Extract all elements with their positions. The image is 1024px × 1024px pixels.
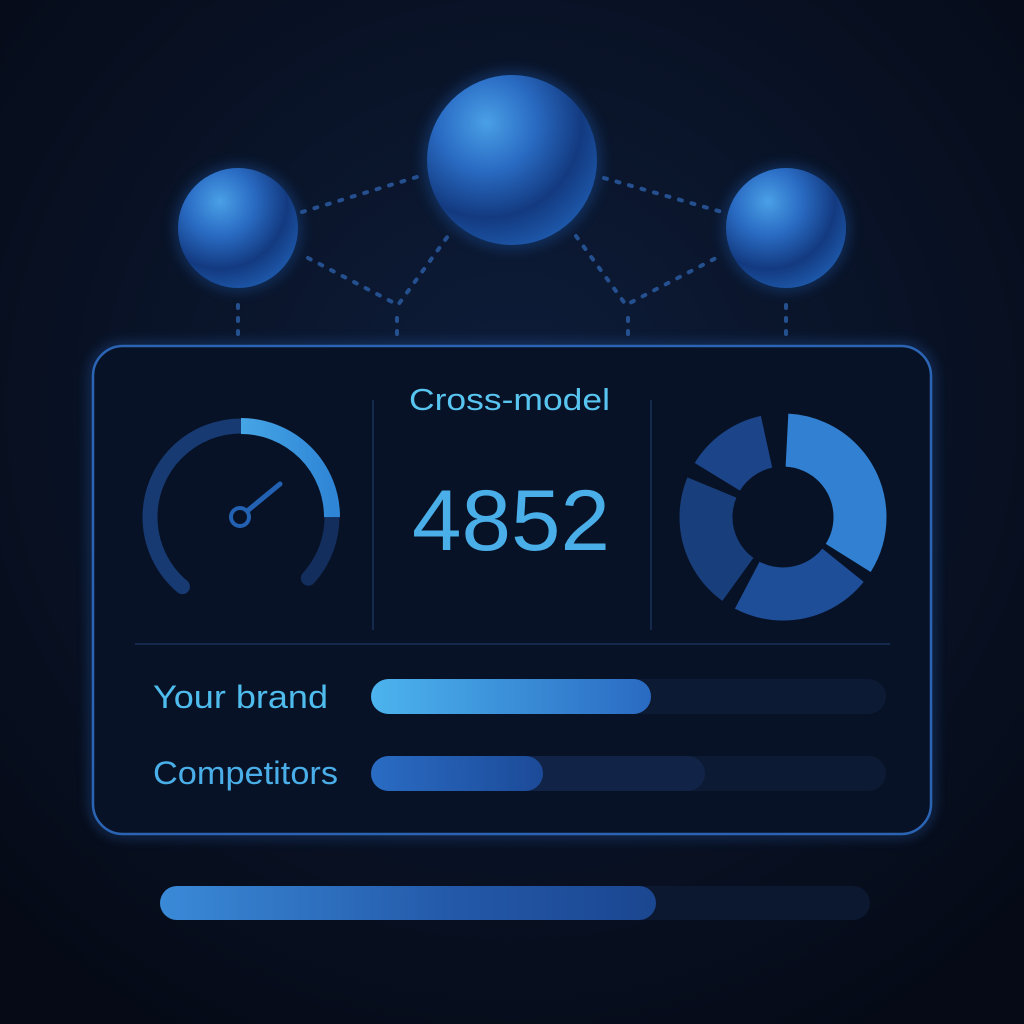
label: Your brand: Your brand (153, 679, 328, 715)
sphere: center (422, 70, 602, 250)
gauge needle (231, 484, 280, 526)
gauge (150, 426, 332, 608)
label: Cross-model: Cross-model (409, 382, 610, 417)
big number: 4852 (412, 473, 610, 569)
sphere: left (174, 164, 302, 292)
sphere: right (722, 164, 850, 292)
donut chart (706, 440, 860, 594)
panel: dashboard card (93, 346, 931, 834)
bottom progress bar (160, 886, 870, 920)
bar: competitors (371, 756, 886, 791)
label: Competitors: Competitors (153, 755, 338, 791)
connector lines: dotted network (238, 176, 786, 340)
bar: your brand (371, 679, 886, 714)
